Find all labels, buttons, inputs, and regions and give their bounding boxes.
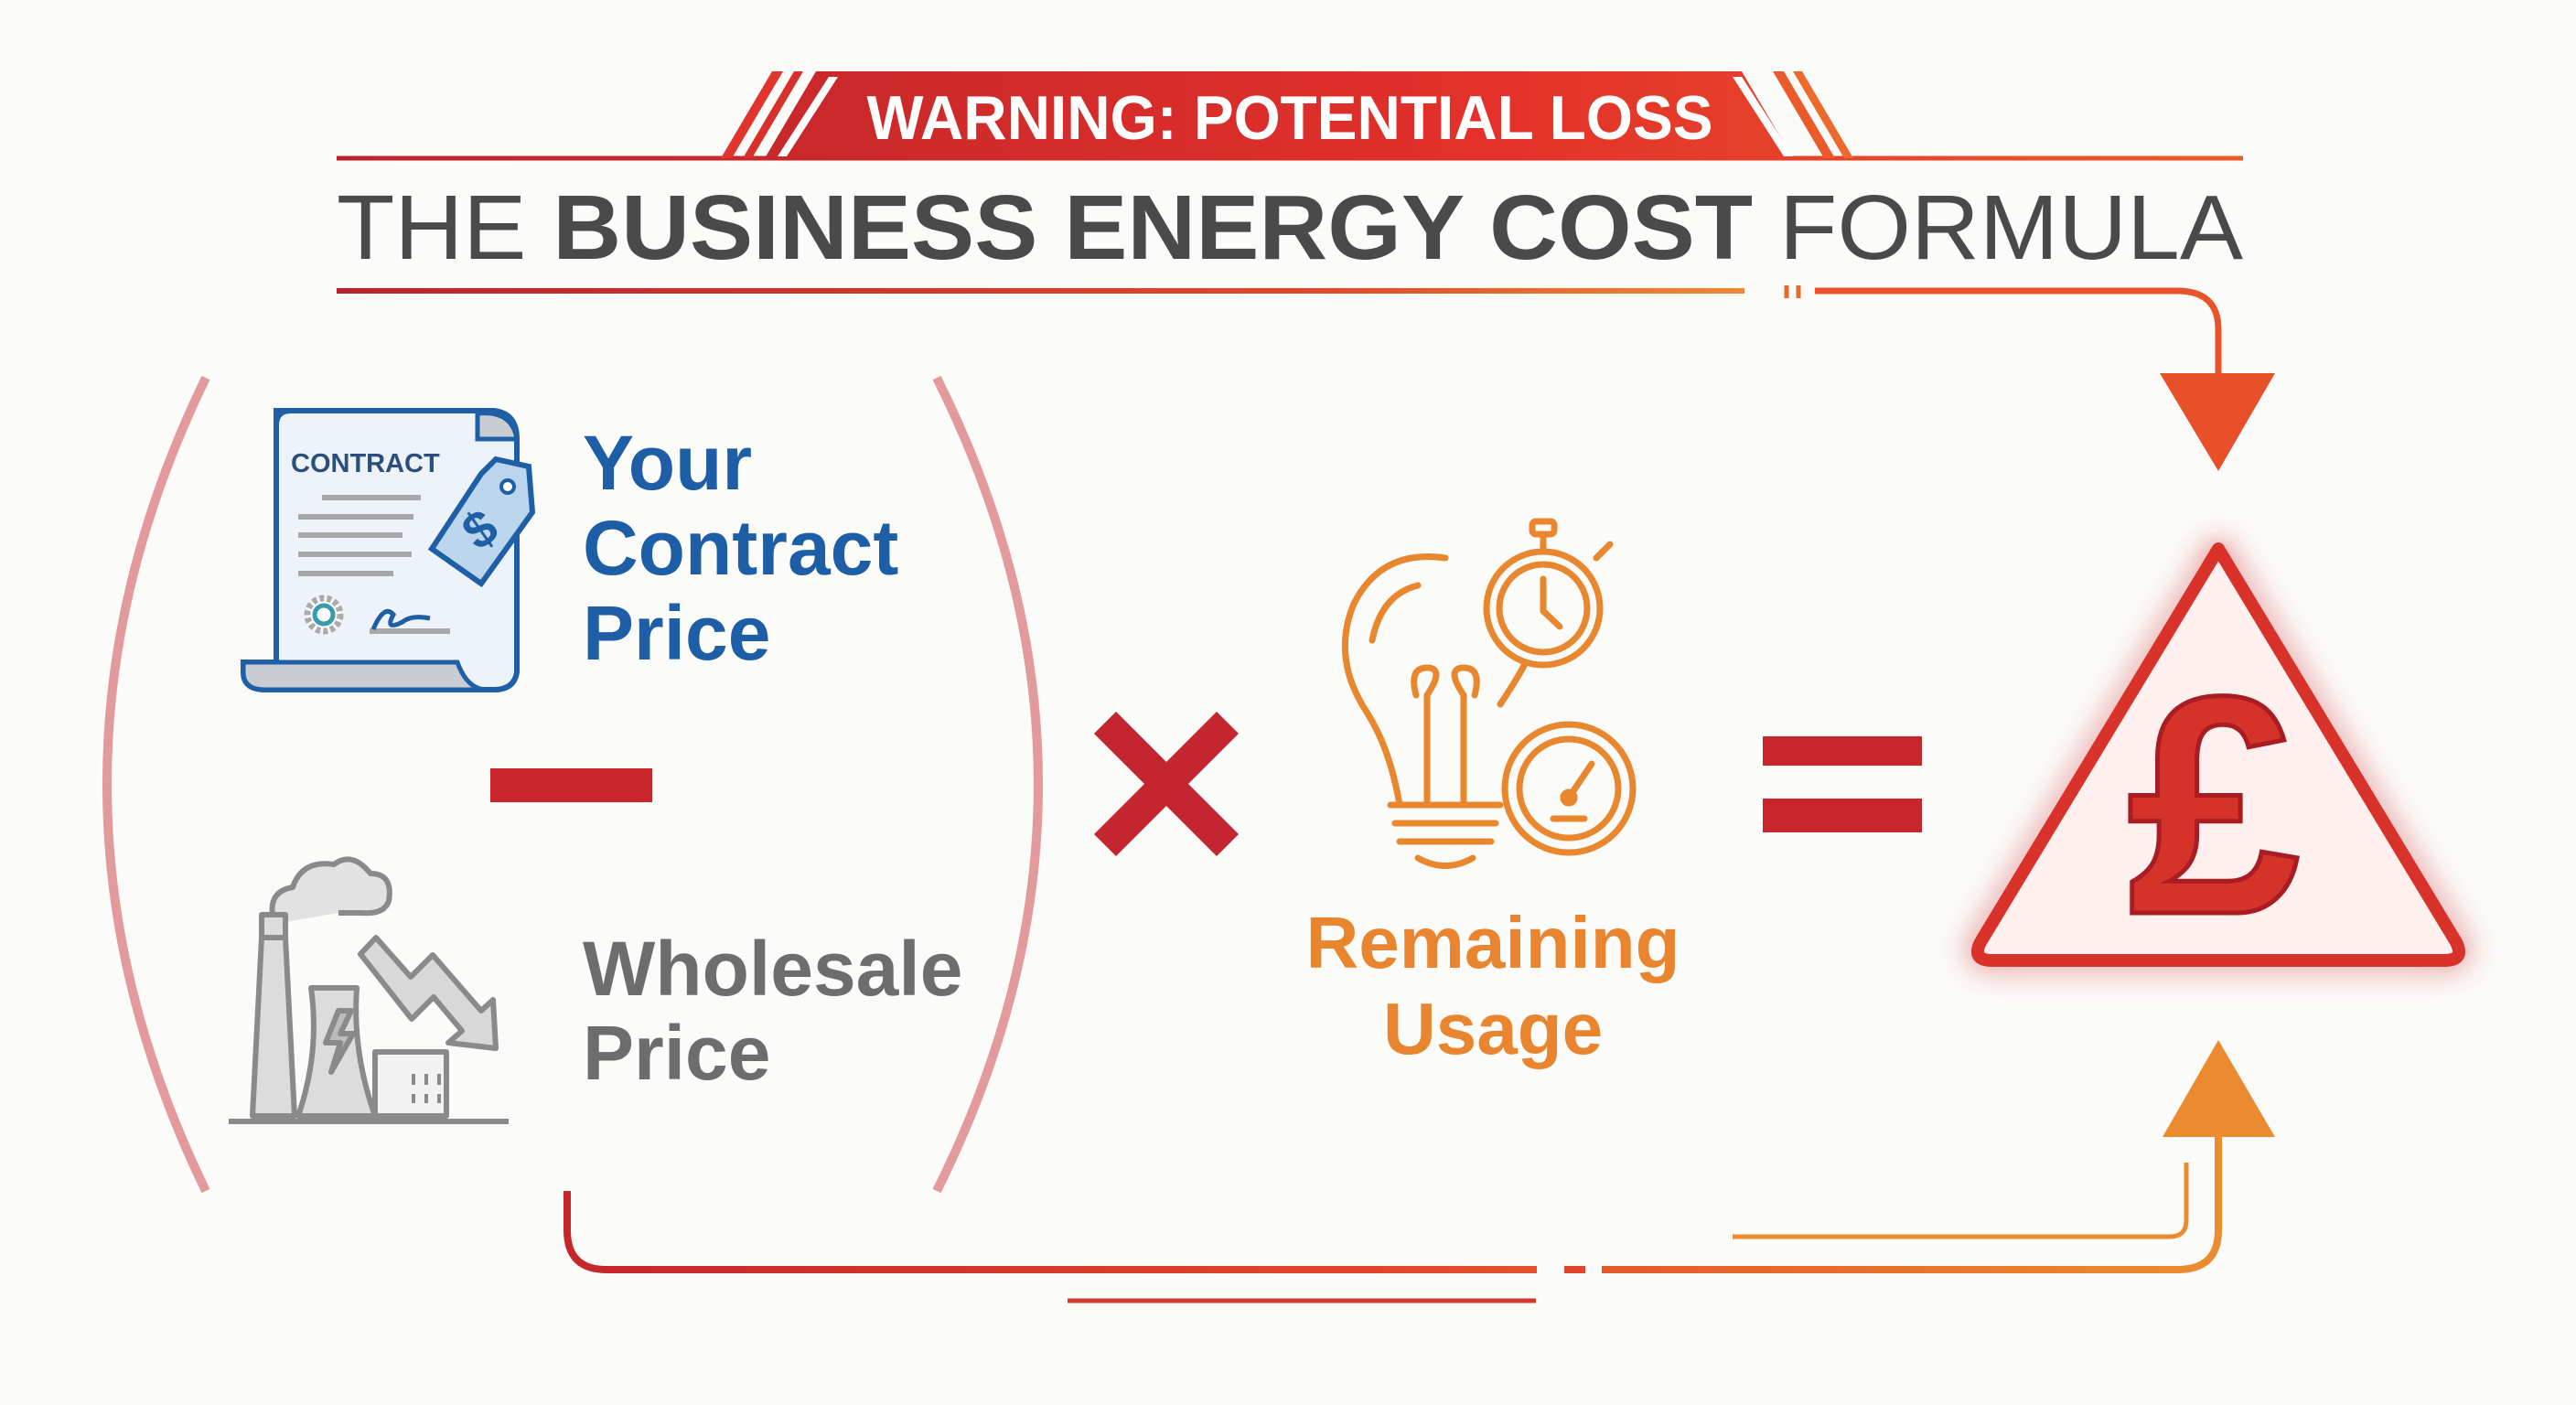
icon: power plant with falling price [229, 859, 509, 1121]
bracket: right parenthesis [937, 378, 1038, 1191]
icon: warning triangle with pound sign: £ [2127, 632, 2301, 980]
banner: warning [337, 71, 2243, 158]
icon: contract with price tag: CONTRACT [291, 449, 440, 478]
operator: equals [1763, 736, 1922, 832]
arrow: top connector to result [337, 285, 2275, 471]
text: wholesale price: Price [583, 1010, 770, 1096]
icon: contract with price tag: $ [451, 498, 508, 561]
arrow: bottom connector to result [567, 1040, 2275, 1301]
icon: bulb with stopwatch and gauge [1345, 521, 1633, 865]
operator: minus [490, 768, 652, 802]
text: your contract price: Price [583, 590, 770, 676]
icon: contract with price tag [243, 411, 532, 690]
text: wholesale price: Wholesale [583, 926, 962, 1012]
banner text: WARNING: POTENTIAL LOSS [867, 83, 1712, 153]
icon: warning triangle with pound sign [1978, 549, 2459, 980]
title: THE BUSINESS ENERGY COST FORMULA [337, 177, 2243, 279]
bracket: left parenthesis [107, 378, 206, 1191]
operator: multiply [1105, 723, 1228, 845]
text: remaining usage: Usage [1383, 988, 1603, 1069]
text: your contract price: Contract [583, 505, 898, 591]
text: remaining usage: Remaining [1306, 902, 1680, 983]
text: your contract price: Your [583, 420, 752, 506]
